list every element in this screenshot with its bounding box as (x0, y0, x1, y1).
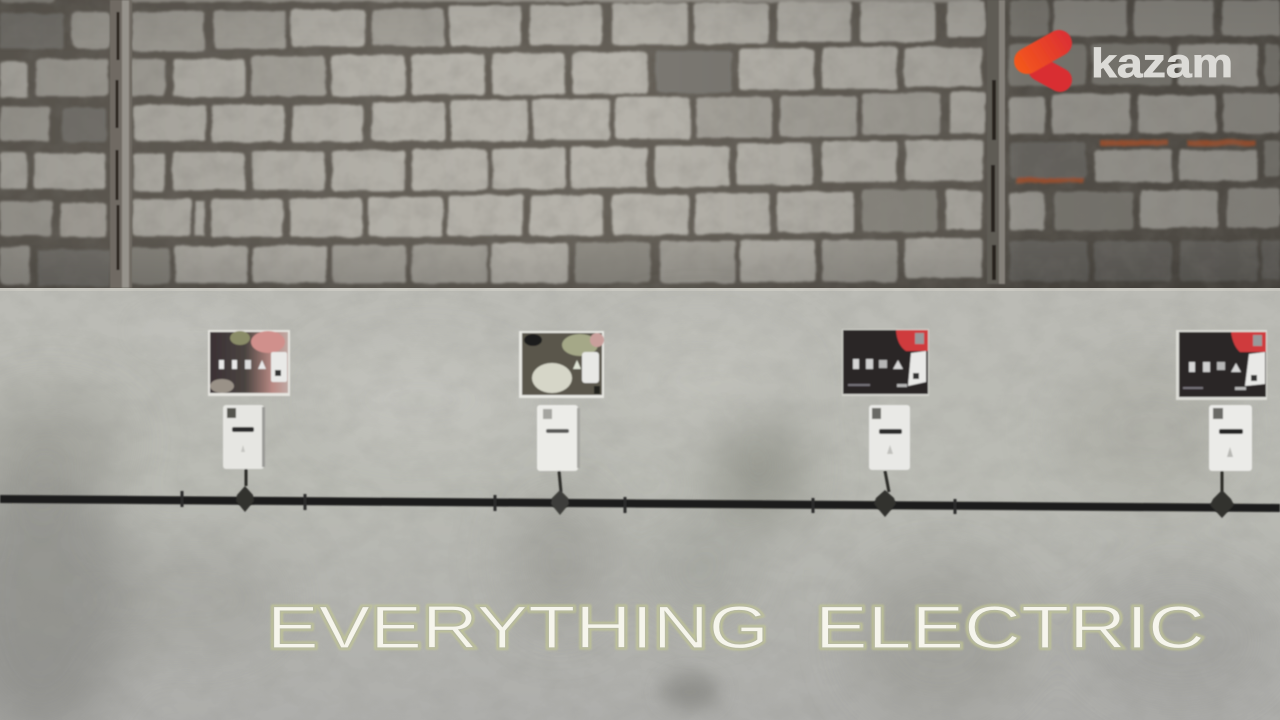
title: everything electric: ELECTRIC (815, 594, 1205, 661)
poster 1 (208, 330, 290, 396)
row 4 (0, 153, 27, 189)
cable connector 1 (244, 469, 248, 486)
charger 4 (1209, 405, 1252, 471)
brick wall (0, 0, 1280, 290)
row 3 (0, 107, 50, 141)
charging station 2 (519, 331, 604, 515)
concrete wall (0, 288, 1280, 720)
poster 4 (1176, 330, 1267, 400)
junction 3 (874, 490, 896, 517)
title: everything electric: ELECTRIC (815, 594, 1205, 661)
cable connector 3 (885, 471, 889, 492)
kazam logo (1027, 40, 1233, 86)
junction 1 (236, 486, 254, 512)
logo wordmark: kazam (1091, 40, 1233, 86)
conduit pipe (0, 491, 1280, 514)
title: everything electric: EVERYTHING (267, 594, 769, 661)
row 1 (0, 13, 64, 49)
junction 4 (1210, 490, 1234, 518)
poster 2 (519, 331, 604, 398)
charging station 3 (842, 329, 929, 517)
row 5 (0, 201, 52, 236)
row 2 (0, 62, 28, 98)
row 6 (0, 246, 30, 284)
logo mark (1027, 43, 1060, 80)
title: everything electric: EVERYTHING (267, 594, 769, 661)
cable connector 4 (1220, 471, 1224, 492)
charger 3 (869, 405, 910, 470)
title: everything electric (267, 594, 1205, 661)
charger 1 (223, 405, 265, 469)
charging station 1 (208, 330, 290, 512)
charging station 4 (1176, 330, 1267, 518)
poster 3 (842, 329, 929, 396)
cable connector 2 (559, 471, 561, 492)
charger 2 (537, 405, 580, 471)
junction 2 (551, 490, 569, 515)
